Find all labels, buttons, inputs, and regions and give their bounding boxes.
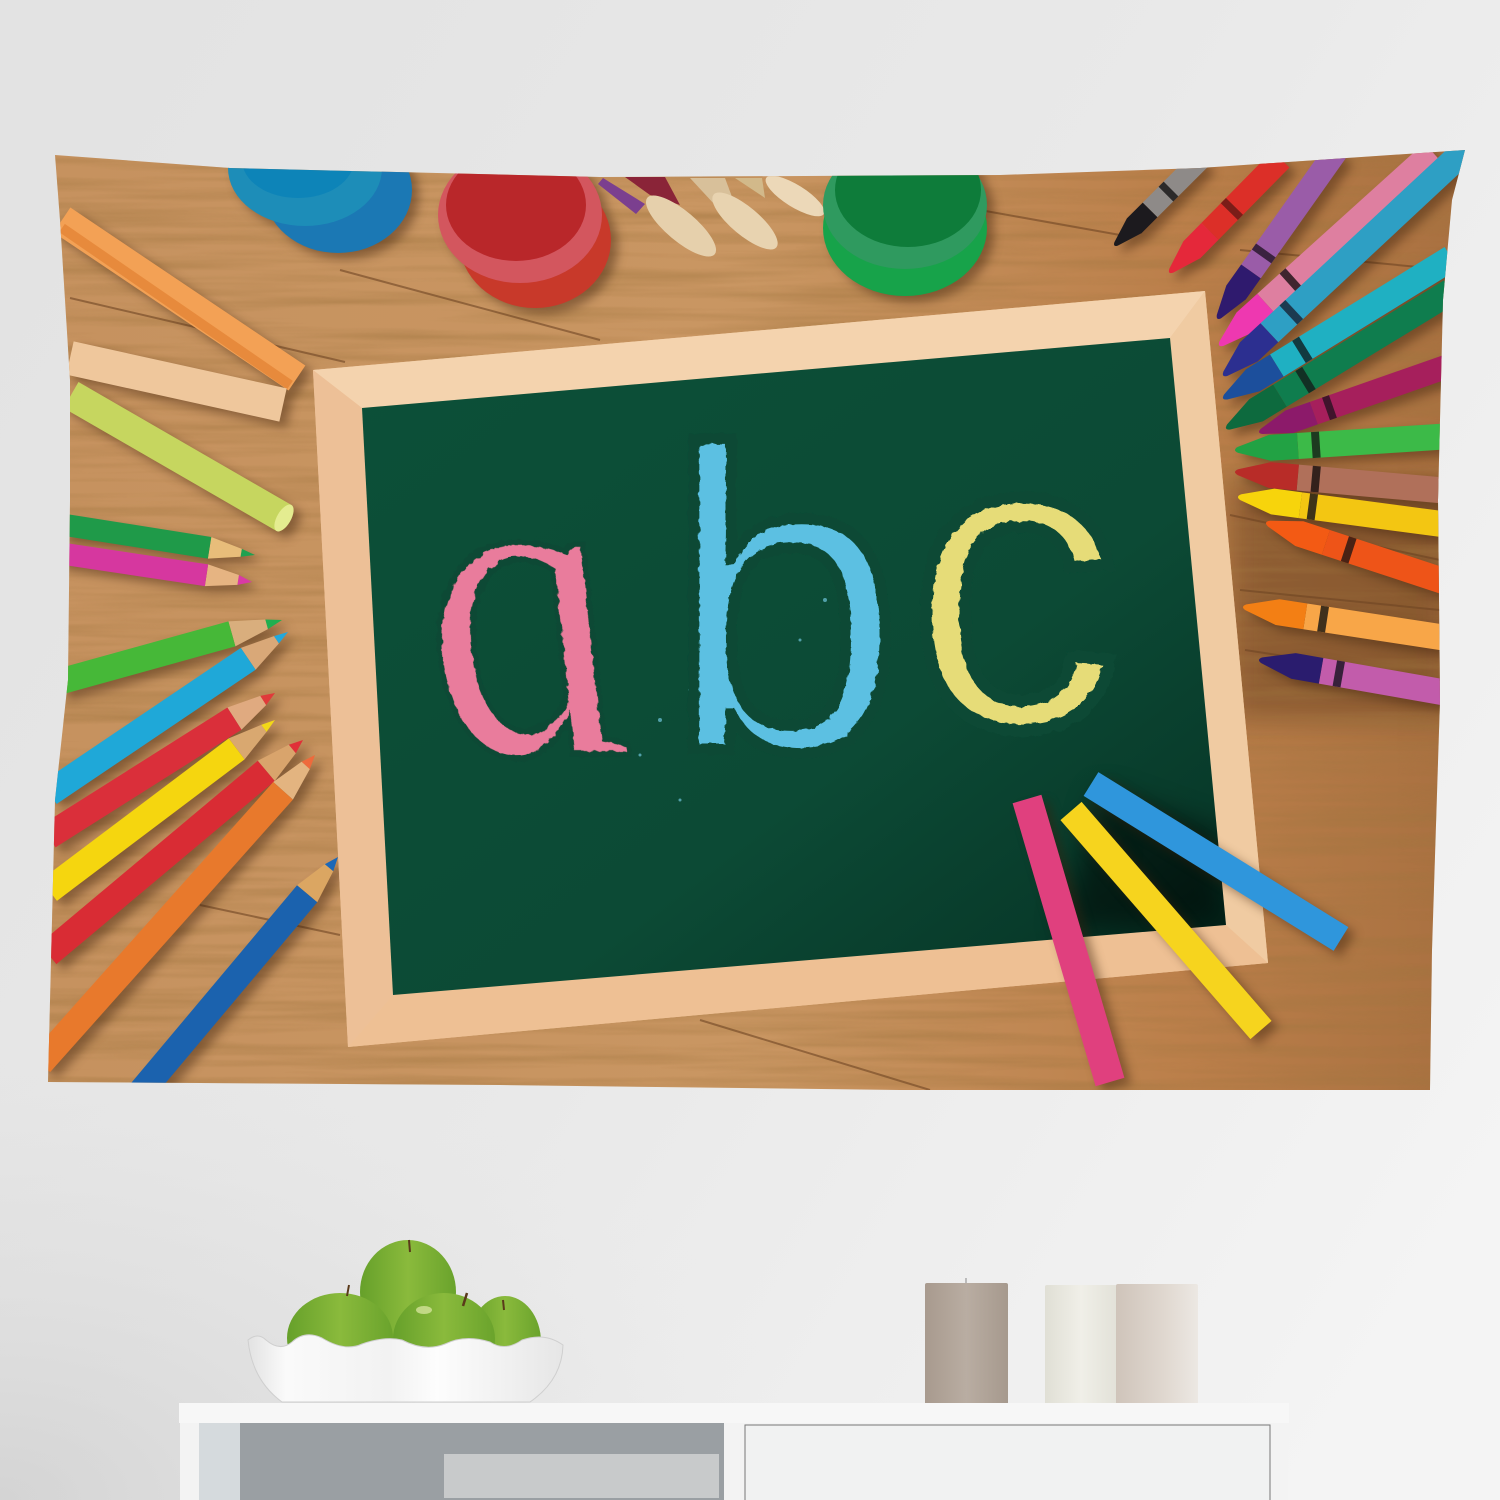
- pencil: red: [41, 682, 282, 847]
- wooden frame: [313, 291, 1268, 1047]
- pencil: yellow: [41, 709, 283, 901]
- candle: taupe: [925, 1278, 1008, 1405]
- crayon: black: [1114, 167, 1218, 256]
- wood table surface: [40, 140, 1470, 1100]
- apple: left: [287, 1285, 393, 1383]
- apple: right: [469, 1296, 541, 1388]
- crayon: orange: [1241, 594, 1451, 651]
- crayon: teal: [1216, 247, 1458, 410]
- letter b: b: [665, 362, 903, 840]
- open shelf: [199, 1423, 724, 1500]
- crayon: yellow: [1236, 484, 1451, 538]
- paint brushes: [598, 176, 824, 256]
- pencil: dark green: [60, 513, 257, 566]
- white bowl: [248, 1335, 563, 1402]
- candle: beige: [1116, 1284, 1198, 1405]
- pencil: light green: [55, 607, 285, 695]
- chalk dust: [638, 598, 827, 802]
- paint jar: blue: [228, 168, 424, 264]
- letter c: c: [908, 342, 1120, 817]
- book: [444, 1454, 719, 1498]
- letter a: a: [345, 354, 681, 852]
- crayon: green: [1234, 423, 1448, 463]
- cabinet top: [179, 1403, 1289, 1423]
- candle: cream: [1045, 1285, 1117, 1405]
- apple: middle: [393, 1293, 495, 1385]
- crayon: blue: [1222, 150, 1465, 385]
- crayon: purple: [1208, 144, 1346, 326]
- apples: [287, 1240, 541, 1388]
- pencil: magenta: [57, 542, 254, 593]
- pencil: red long: [39, 730, 311, 964]
- paint jar: green: [823, 175, 1000, 308]
- fruit bowl: [248, 1240, 563, 1402]
- chalk sticks: top left: [62, 220, 298, 534]
- chalkboard: [313, 291, 1268, 1047]
- crayon: dark green: [1219, 280, 1457, 440]
- coloured pencils: left: [48, 514, 340, 1083]
- pencil: orange: [30, 746, 325, 1072]
- chalk sticks: bottom right: [1027, 784, 1341, 1082]
- paint jar: red: [438, 147, 611, 308]
- crayon: brown: [1234, 459, 1448, 504]
- white cabinet: [179, 1403, 1289, 1500]
- drawer: [745, 1425, 1270, 1500]
- crayon: violet: [1257, 647, 1451, 706]
- pencil: sky blue: [42, 621, 295, 804]
- tapestry: [30, 110, 1476, 1109]
- green board: [362, 338, 1226, 995]
- pencil: blue: [132, 857, 340, 1083]
- shadow beneath chalk sticks: [1060, 790, 1225, 930]
- cabinet body: [180, 1423, 1288, 1500]
- crayon: plum: [1259, 356, 1442, 437]
- apple: top: [360, 1240, 456, 1344]
- crayon: pink: [1211, 143, 1442, 355]
- crayon: orange-red: [1262, 510, 1453, 595]
- candles: [925, 1278, 1198, 1405]
- crayon: red: [1161, 151, 1289, 281]
- crayons: right: [1107, 139, 1476, 706]
